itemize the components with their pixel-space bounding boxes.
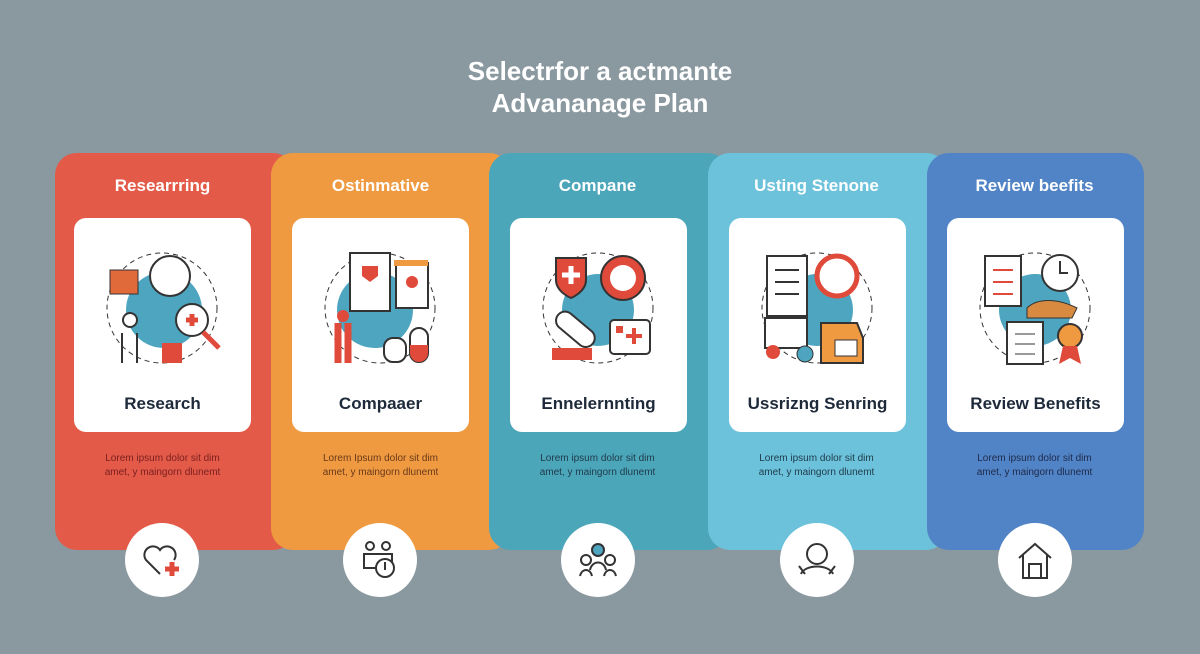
text 4: amet, y maingorn dlunemt — [759, 467, 874, 478]
text 3: Lorem ipsum dolor sit dim — [540, 453, 655, 464]
card label: Compaaer — [339, 394, 422, 413]
text 2: amet, y maingorn dlunemt — [323, 467, 438, 478]
title: Selectrfor a actmante — [468, 56, 732, 86]
icon: review — [980, 252, 1090, 365]
text 3 — [540, 453, 656, 478]
card label: Ennelernnting — [541, 394, 656, 413]
panel: blue — [927, 153, 1144, 550]
card 1 — [74, 218, 251, 432]
panel: light blue — [708, 153, 948, 550]
card 3 — [510, 218, 687, 432]
icon circle 2: people clock — [343, 523, 417, 597]
card label: Ussrizng Senring — [748, 394, 887, 413]
heading 3: Compane — [559, 176, 636, 195]
heading 2: Ostinmative — [332, 176, 429, 195]
panel: orange — [271, 153, 511, 550]
title — [468, 56, 732, 118]
text 5: Lorem ipsum dolor sit dim — [977, 453, 1092, 464]
heading 1: Researrring — [115, 176, 210, 195]
text 5: amet, y maingorn dlunemt — [977, 467, 1092, 478]
card 2 — [292, 218, 469, 432]
icon circle 1: heart plus — [125, 523, 199, 597]
heading 5: Review beefits — [975, 176, 1094, 195]
card 4 — [729, 218, 906, 432]
text 2 — [323, 453, 438, 478]
heading 4: Usting Stenone — [754, 176, 879, 195]
card 5 — [947, 218, 1124, 432]
card label: Research — [124, 394, 201, 413]
card label: Review Benefits — [970, 394, 1101, 413]
text 5 — [977, 453, 1092, 478]
text 4: Lorem ipsum dolor sit dim — [759, 453, 874, 464]
text 2: Lorem Ipsum dolor sit dim — [323, 453, 438, 464]
icon: compare — [324, 252, 436, 364]
icon: compare plans — [542, 252, 654, 364]
text 3: amet, y maingorn dlunemt — [540, 467, 655, 478]
text 1 — [105, 453, 220, 478]
title: Advananage Plan — [492, 88, 708, 118]
icon circle 5: house — [998, 523, 1072, 597]
icon: using — [762, 252, 872, 364]
text 1: Lorem ipsum dolor sit dim — [105, 453, 220, 464]
icon circle 3: group — [561, 523, 635, 597]
text 4 — [759, 453, 874, 478]
text 1: amet, y maingorn dlunemt — [105, 467, 220, 478]
icon circle 4: people — [780, 523, 854, 597]
panel: teal — [489, 153, 729, 550]
icon: research — [106, 252, 221, 364]
panel: red — [55, 153, 295, 550]
